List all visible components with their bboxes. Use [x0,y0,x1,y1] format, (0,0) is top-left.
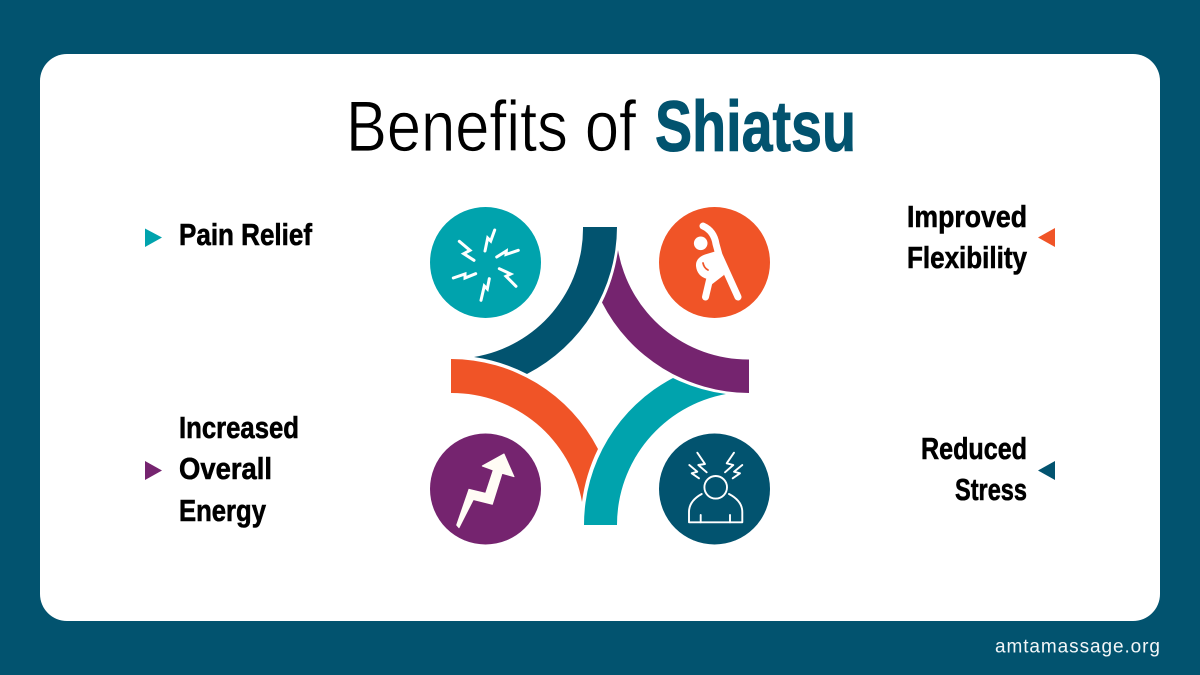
label: Increased Overall Energy: Energy [179,493,267,528]
label: Increased Overall Energy [145,410,299,528]
title [346,88,856,167]
label: Increased Overall Energy: Increased [179,410,299,445]
arc: orange [451,359,598,502]
icon: stretching figure [659,207,770,318]
label: Improved Flexibility: Flexibility [907,240,1028,275]
label: Reduced Stress [921,431,1055,507]
footer: website: amtamassage.org [995,636,1160,658]
title: Benefits of: Benefits of [346,88,636,167]
icon: pain relief bolts [430,207,541,318]
label: Improved Flexibility [907,199,1055,275]
panel: white card [40,54,1160,621]
arc: purple [602,250,749,393]
title: Shiatsu: Shiatsu [655,88,856,167]
label: Pain Relief [145,217,313,252]
icon: energy arrow [430,434,541,544]
label: Pain Relief: Pain Relief [179,217,313,252]
label: Reduced Stress: Reduced [921,431,1027,466]
central diagram: four curved arcs [451,227,749,525]
icon: stressed person [659,434,770,544]
label: Improved Flexibility: Improved [907,199,1027,234]
label: Increased Overall Energy: Overall [179,451,272,486]
label: Reduced Stress: Stress [955,472,1027,507]
arc: navy [474,227,617,374]
arc: teal [584,378,726,525]
